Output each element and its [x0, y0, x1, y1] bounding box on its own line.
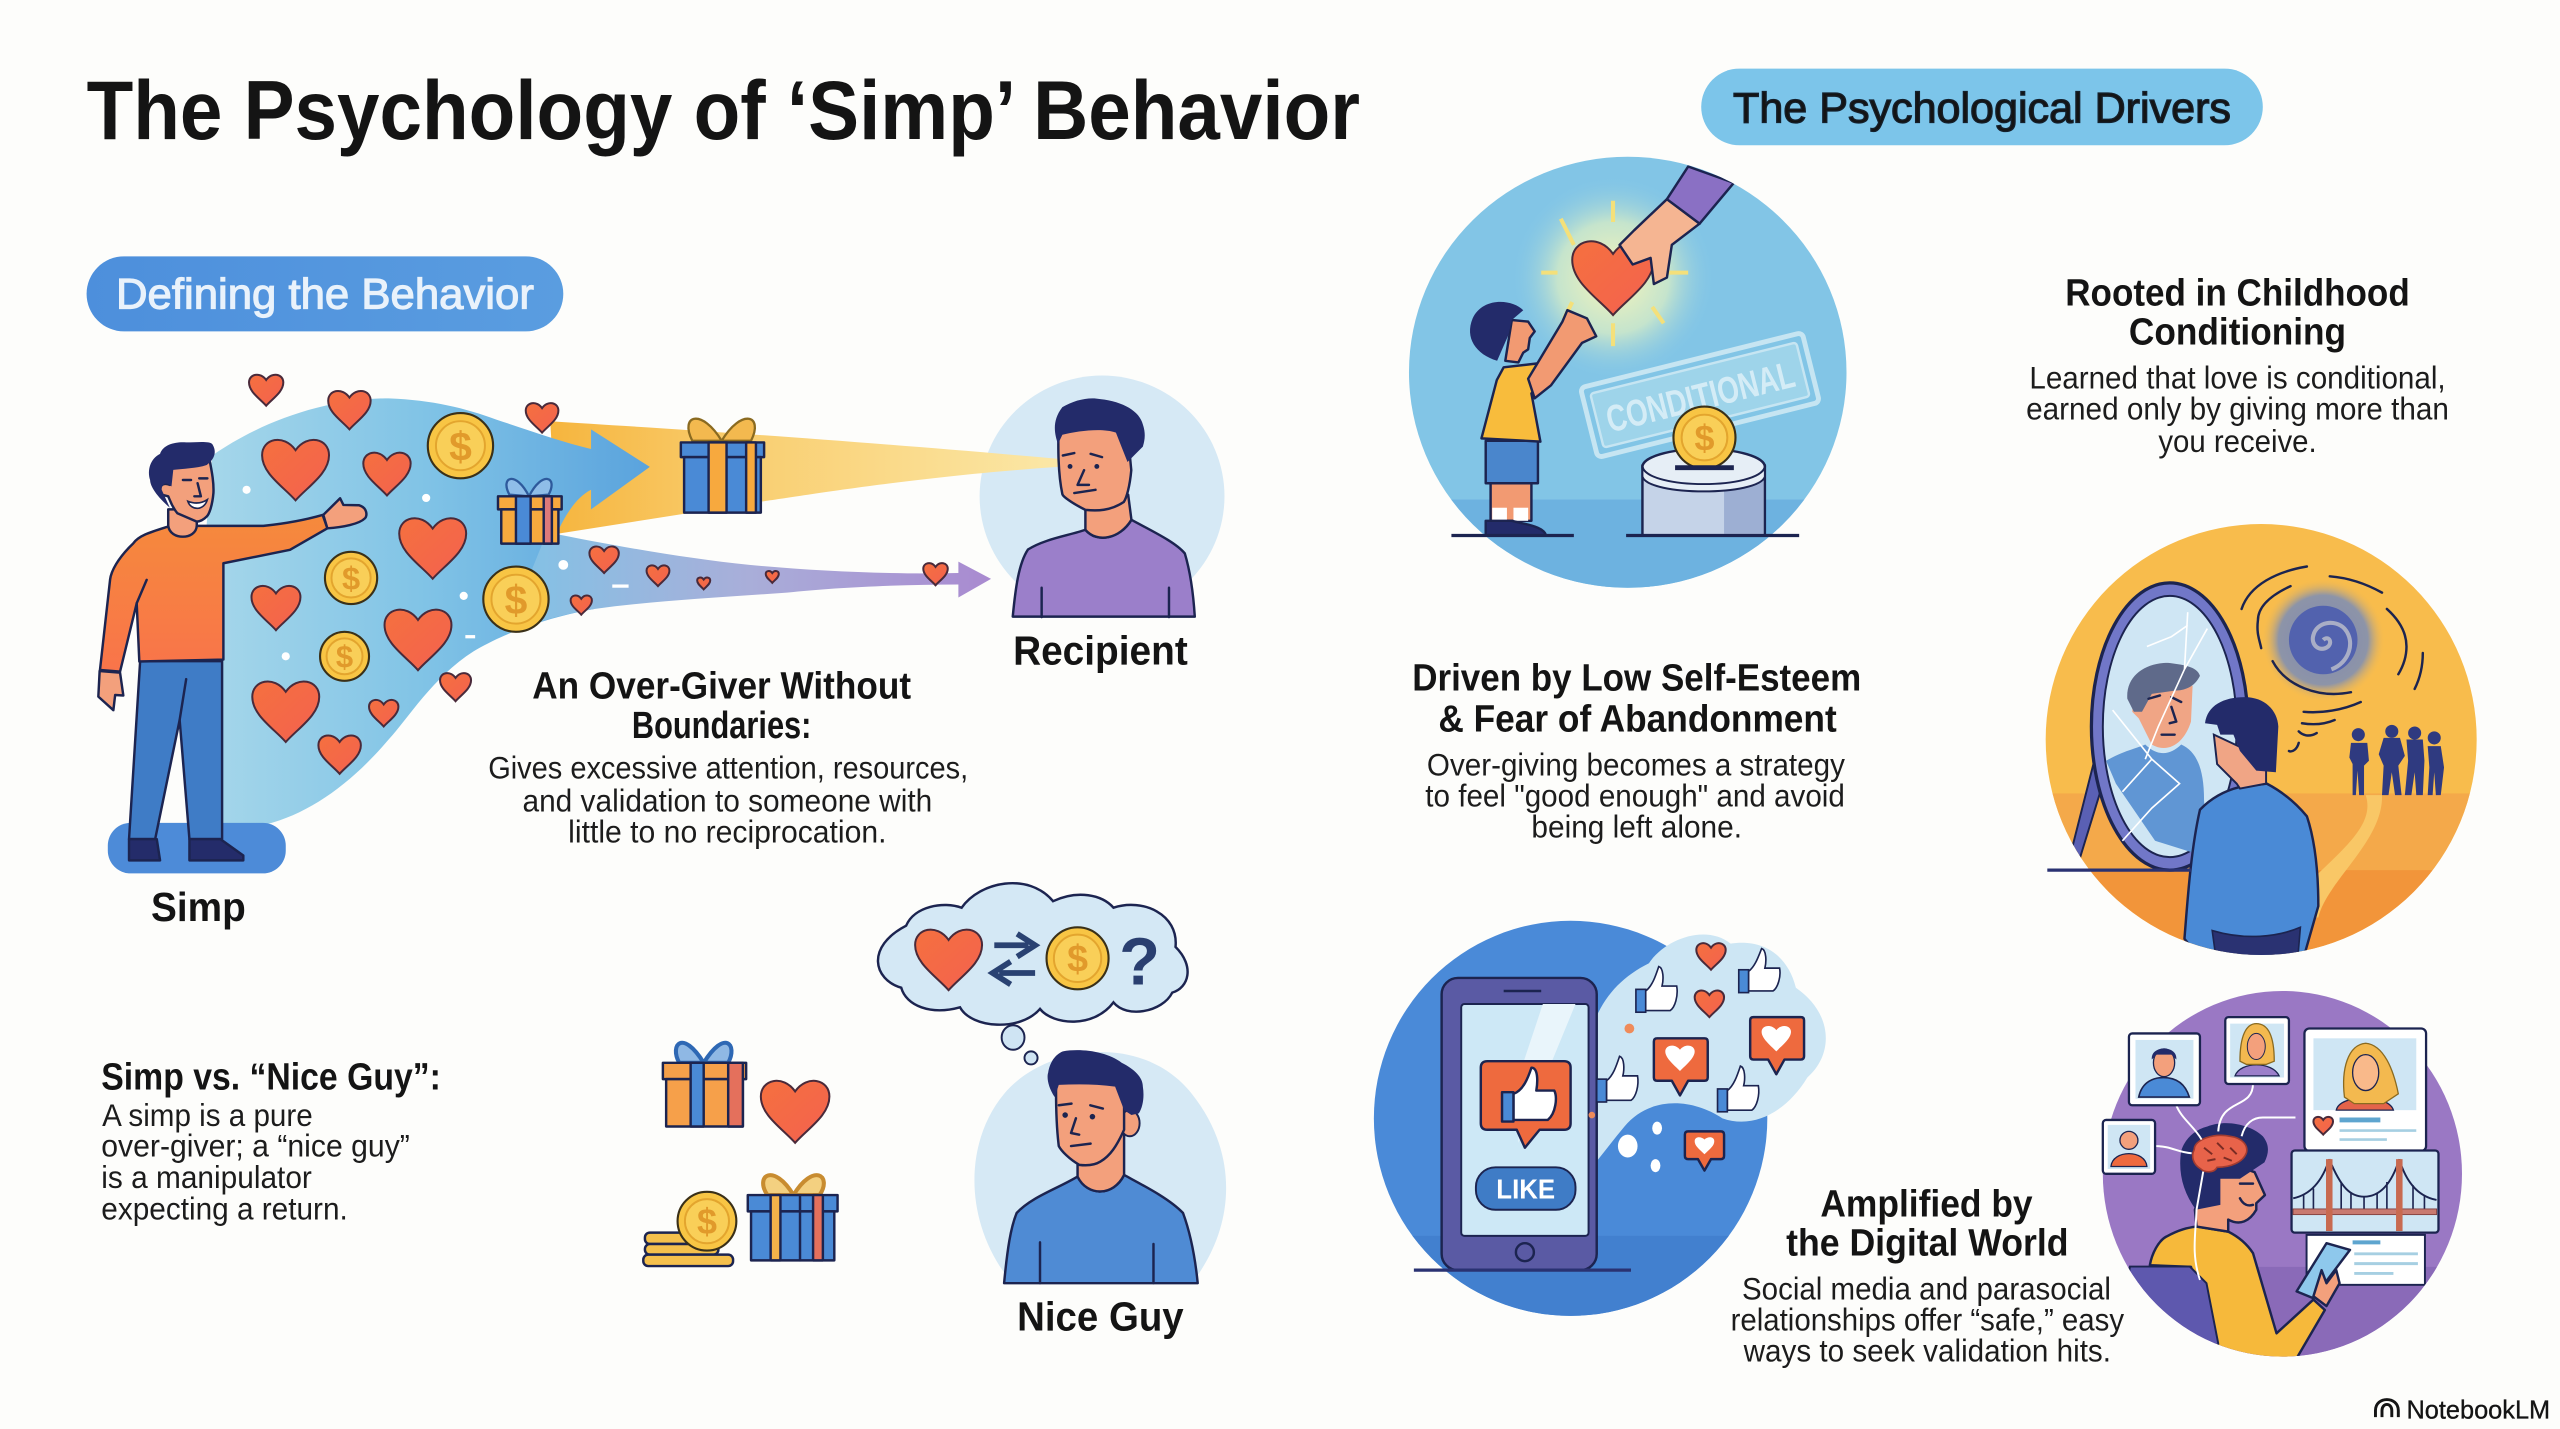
illustration: childhood conditioning circle	[1404, 153, 1853, 598]
connection wires	[2155, 1083, 2295, 1280]
coin box: $	[1694, 418, 1714, 459]
mirror stand	[2072, 764, 2100, 858]
recipient backdrop circle	[980, 375, 1224, 617]
text block: Simp vs Nice Guy: A simp is a pure	[102, 1097, 313, 1133]
text block: Amplified by the Digital World	[1731, 1182, 2124, 1369]
hair	[1055, 398, 1145, 462]
text block: An Over-Giver Without Boundaries: Gives excessive attention, resources,	[488, 750, 968, 786]
heart	[761, 1081, 829, 1143]
phone body	[1442, 978, 1597, 1270]
text block: Amplified by the Digital World: Amplified by	[1820, 1182, 2033, 1224]
small gift	[498, 479, 562, 544]
conditional stamp	[1580, 333, 1820, 458]
text block: Driven by Low Self-Esteem: to feel "good enough" and avoid	[1425, 777, 1845, 813]
shirt	[1004, 1175, 1198, 1283]
like cloud	[1587, 935, 1826, 1172]
text block: Simp vs Nice Guy: is a manipulator	[101, 1159, 312, 1195]
text block: Amplified by the Digital World: Social media and parasocial	[1742, 1271, 2111, 1307]
coins stream	[320, 413, 549, 681]
illustration: digital world circle	[2096, 986, 2472, 1365]
hair	[149, 442, 215, 508]
section pill: Defining the Behavior	[87, 256, 563, 331]
ground line	[1414, 1269, 1631, 1271]
neck	[1078, 1126, 1124, 1191]
text block: Simp vs Nice Guy: expecting a return.	[101, 1191, 348, 1227]
text block: An Over-Giver Without Boundaries: and validation to someone with	[522, 782, 932, 818]
left hand	[98, 671, 123, 710]
face	[160, 457, 214, 522]
thumb	[1513, 1068, 1556, 1120]
brain folds	[2204, 1143, 2237, 1161]
floor lines under boy and box	[1451, 534, 1799, 536]
floating hearts	[1695, 943, 1726, 1017]
purple thin stream with arrow	[506, 532, 991, 633]
heart	[1572, 241, 1654, 315]
question mark: ?	[1119, 924, 1160, 999]
facial features	[1059, 1104, 1103, 1146]
phone and hand	[2297, 1243, 2350, 1306]
floor	[1451, 500, 1804, 588]
mid ground	[2041, 793, 2482, 875]
gift blue	[748, 1175, 838, 1260]
backdrop	[2096, 986, 2472, 1365]
exchange arrows	[994, 934, 1035, 957]
text block: Driven by Low Self-Esteem	[1412, 657, 1861, 845]
figure: simp	[98, 442, 366, 873]
neck	[168, 509, 197, 537]
blue flow band and arrow	[204, 398, 650, 824]
coin stack	[643, 1192, 736, 1266]
torso and arms	[100, 515, 327, 672]
large gift	[681, 419, 764, 513]
text block: Rooted in Childhood Conditioning: earned only by giving more than	[2026, 391, 2449, 427]
phone details	[1504, 990, 1541, 992]
neck	[1085, 495, 1131, 538]
heart	[915, 930, 982, 990]
like pill: LIKE	[1496, 1173, 1555, 1204]
shoes	[129, 839, 243, 860]
gift orange	[663, 1043, 746, 1126]
section pill: Defining the Behavior: Defining the Behavior	[116, 271, 534, 318]
screen glare	[1518, 1004, 1575, 1143]
text block: Driven by Low Self-Esteem: & Fear of Abandonment	[1438, 697, 1837, 739]
hearts stream	[249, 375, 948, 774]
man hair	[2205, 697, 2278, 772]
flow illustration: simp to recipient	[204, 375, 1058, 824]
base pill	[108, 823, 286, 873]
brain	[2193, 1135, 2247, 1172]
coins stream: $	[449, 423, 472, 469]
desk band	[2096, 1267, 2472, 1362]
legs	[129, 661, 222, 839]
ear	[1120, 1110, 1140, 1136]
text block: Simp vs Nice Guy: Simp vs. “Nice Guy”:	[101, 1056, 441, 1098]
white sparkles	[242, 486, 629, 660]
title: The Psychology of ‘Simp’ Behavior	[87, 64, 1360, 157]
coin stack: $	[697, 1201, 717, 1242]
backdrop	[1368, 914, 1776, 1322]
illustration: broken mirror circle	[2041, 519, 2482, 966]
text block: Rooted in Childhood Conditioning	[2026, 271, 2449, 459]
coin	[1047, 927, 1109, 989]
anxiety swirl	[2242, 567, 2423, 751]
text block: Simp vs Nice Guy	[101, 1056, 441, 1227]
lower ground	[1368, 1236, 1776, 1326]
man hem	[2212, 927, 2300, 966]
mirror	[2091, 583, 2248, 870]
label: Nice Guy: Nice Guy	[1017, 1294, 1184, 1340]
phone screen	[1461, 1004, 1589, 1236]
text block: An Over-Giver Without Boundaries	[488, 665, 968, 849]
conditional stamp: CONDITIONAL	[1602, 353, 1799, 440]
backdrop circle	[974, 1052, 1226, 1283]
text block: Amplified by the Digital World: ways to seek validation hits.	[1743, 1333, 2111, 1369]
like pill	[1476, 1167, 1575, 1210]
ground line under mirror	[2047, 869, 2191, 871]
yellow beam to recipient	[550, 421, 1058, 534]
backdrop	[2041, 519, 2482, 960]
text block: Amplified by the Digital World: relationships offer “safe,” easy	[1731, 1302, 2124, 1338]
facial features	[1063, 453, 1102, 493]
label: Simp: Simp	[151, 884, 246, 930]
mirror cracks	[2113, 612, 2207, 841]
cloud shape	[878, 883, 1188, 1025]
figure: nice guy	[974, 1050, 1226, 1283]
coin box	[1642, 407, 1765, 535]
silhouettes	[2349, 725, 2444, 795]
lower card behind phone	[2307, 1235, 2425, 1285]
card: text post lines	[2353, 1242, 2418, 1273]
face	[1058, 421, 1131, 510]
heart bubbles	[1654, 1017, 1804, 1171]
thought bubbles	[1002, 1025, 1038, 1064]
text block: Driven by Low Self-Esteem: Over-giving becomes a strategy	[1427, 746, 1845, 782]
path	[2316, 795, 2382, 918]
card: bridge photo	[2292, 1150, 2438, 1233]
coins stream: $	[336, 640, 353, 675]
giving hand	[1620, 199, 1700, 284]
section pill: The Psychological Drivers: The Psychological Drivers	[1733, 84, 2231, 131]
rays	[1541, 201, 1688, 346]
thought cloud: expected exchange	[878, 883, 1188, 1064]
like bubble on screen	[1481, 1061, 1571, 1148]
card: woman avatar	[2225, 1017, 2289, 1084]
man neck and ear	[2214, 735, 2266, 789]
coin: $	[1067, 937, 1088, 979]
boy	[1470, 302, 1596, 535]
card: profile post	[2304, 1029, 2426, 1151]
hair	[1048, 1050, 1143, 1115]
near ground	[2091, 870, 2432, 955]
coins stream: $	[505, 577, 528, 623]
face features	[183, 478, 207, 480]
illustration: phone and likes circle	[1368, 914, 1826, 1326]
text block: Driven by Low Self-Esteem: Driven by Low Self-Esteem	[1412, 657, 1861, 699]
text block: An Over-Giver Without Boundaries: Boundaries:	[632, 704, 811, 746]
text block: An Over-Giver Without Boundaries: An Over-Giver Without	[532, 665, 911, 707]
glow	[1527, 192, 1699, 364]
sleeve	[1667, 167, 1734, 224]
icon cluster: gifts, heart and coins	[643, 1043, 838, 1266]
text block: Rooted in Childhood Conditioning: Rooted in Childhood	[2065, 271, 2410, 313]
card: small avatar	[2103, 1120, 2155, 1174]
figure: recipient	[1013, 398, 1195, 617]
text block: Amplified by the Digital World: the Digital World	[1786, 1221, 2069, 1263]
reflection	[2106, 663, 2207, 857]
neck and face	[2195, 1162, 2265, 1232]
text block: Driven by Low Self-Esteem: being left alone.	[1531, 809, 1742, 845]
floating thumbs	[1597, 949, 1780, 1112]
text block: Simp vs Nice Guy: over-giver; a “nice guy”	[101, 1128, 410, 1164]
text block: An Over-Giver Without Boundaries: little to no reciprocation.	[568, 813, 887, 849]
text block: Rooted in Childhood Conditioning: you receive.	[2158, 423, 2317, 459]
text block: Rooted in Childhood Conditioning: Learned that love is conditional,	[2029, 360, 2446, 396]
person body	[2150, 1227, 2325, 1358]
seat	[2116, 1267, 2218, 1358]
card: man avatar	[2129, 1033, 2200, 1105]
dots	[1589, 1024, 1662, 1172]
watermark: NotebookLM: NotebookLM	[2406, 1395, 2550, 1425]
backdrop	[1404, 153, 1853, 594]
man body	[2184, 784, 2318, 963]
face	[1056, 1069, 1124, 1165]
hair	[2180, 1123, 2268, 1210]
label: Recipient: Recipient	[1013, 627, 1188, 673]
outstretched hand	[323, 498, 366, 528]
text block: Rooted in Childhood Conditioning: Conditioning	[2129, 310, 2346, 352]
coins stream: $	[342, 559, 360, 596]
shirt	[1013, 520, 1195, 617]
section pill: The Psychological Drivers	[1701, 69, 2263, 145]
